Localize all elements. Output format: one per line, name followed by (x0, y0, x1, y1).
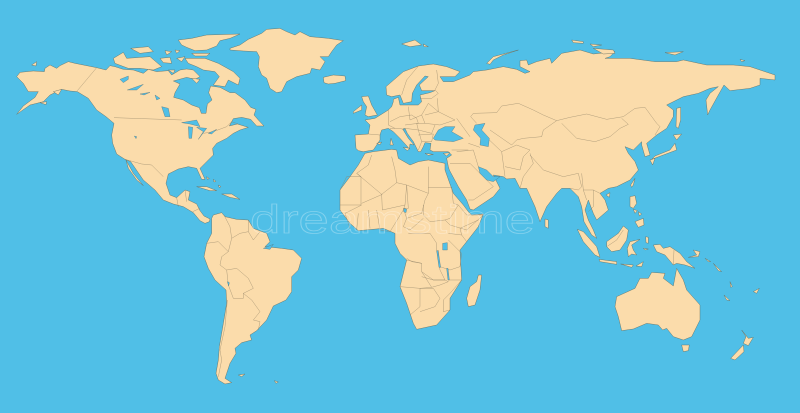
island borders (607, 230, 674, 265)
Australia (615, 268, 700, 340)
North and West African borders (340, 155, 483, 232)
Taiwan, Hainan and Sri Lanka (545, 178, 635, 228)
South American borders (207, 215, 260, 377)
Mediterranean islands (377, 138, 450, 156)
Canada and Mexico borders (77, 68, 238, 212)
Arctic archipelagos (402, 40, 745, 64)
Asian borders (450, 103, 660, 212)
Indonesia and Borneo (577, 226, 648, 267)
New Zealand (731, 330, 753, 360)
Southeast Asia and Oceania (577, 196, 759, 360)
Madagascar (467, 275, 482, 307)
British Isles (353, 96, 377, 117)
European borders (368, 66, 455, 150)
Iceland (323, 75, 346, 84)
Greenland (230, 28, 343, 93)
Africa landmass (340, 149, 483, 329)
Eurasia (353, 40, 775, 238)
Eurasia landmass (355, 50, 775, 238)
Falkland Islands (238, 374, 278, 383)
Pacific islands (705, 258, 759, 301)
Africa (340, 149, 483, 329)
Japan and Sakhalin (650, 107, 682, 165)
South America (204, 213, 302, 384)
Central and Southern African borders (400, 220, 478, 315)
Greenland and Iceland (230, 28, 346, 93)
Philippines (630, 196, 644, 227)
Black Sea, Caspian Sea and Persian Gulf (433, 123, 500, 182)
South America landmass (204, 213, 302, 384)
New Guinea and New Britain (653, 244, 700, 268)
Caribbean and Alaskan islands (32, 62, 240, 199)
North America (17, 34, 264, 223)
Arctic islands (113, 34, 240, 87)
Tasmania (682, 345, 689, 352)
Amazon mouth and Titicaca (227, 244, 273, 286)
watermark: dreamstime (250, 198, 535, 242)
Canada, United States, Mexico and Central America mainland (17, 62, 264, 223)
African lakes (404, 208, 449, 280)
Great Lakes and Canadian lakes (120, 76, 217, 139)
Baja California (126, 160, 143, 186)
